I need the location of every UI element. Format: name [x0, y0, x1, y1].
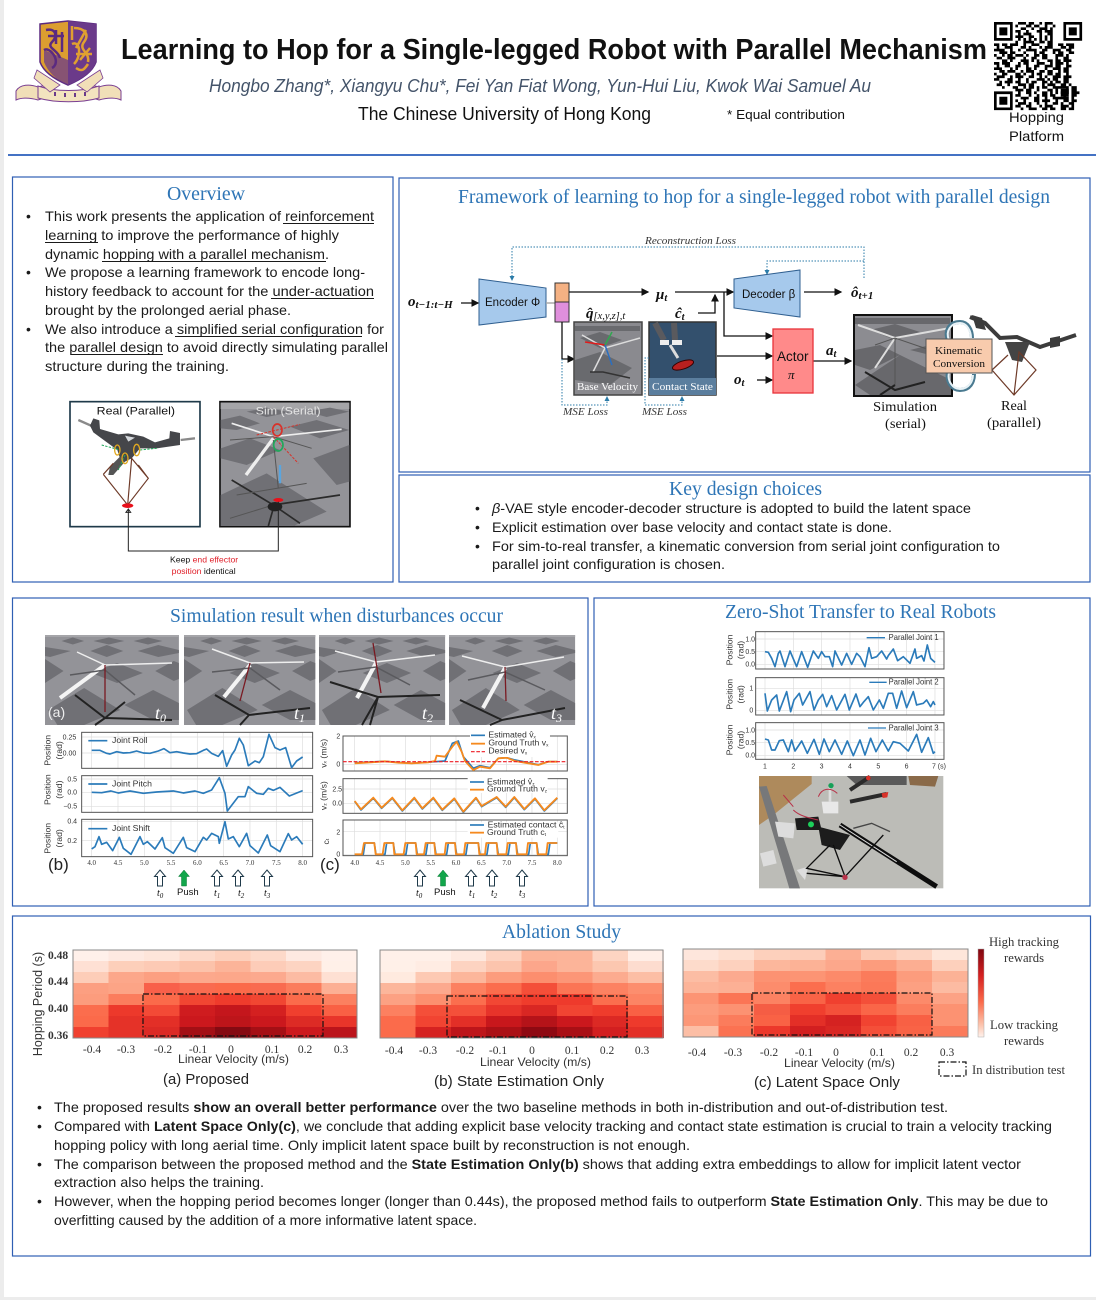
sim frame t1: 1 — [299, 711, 305, 725]
ablation findings bullet list: • — [37, 1156, 42, 1172]
heatmap (a) proposed: 0.44 — [48, 976, 68, 988]
joint roll chart — [43, 732, 313, 768]
colour bar legend: Low tracking — [990, 1018, 1059, 1032]
heatmap (b) state estimation only: Linear Velocity (m/s) — [480, 1055, 591, 1069]
overview bullet list: This work presents the application of reinforcement — [45, 208, 374, 224]
base velocity vz chart: 2.5 — [332, 786, 342, 793]
heatmap (a) proposed: 0.48 — [48, 950, 68, 962]
contact state chart: 7.0 — [502, 859, 512, 867]
base velocity vx chart: x — [525, 751, 528, 756]
contact state chart: 7.5 — [528, 859, 537, 867]
joint shift chart: 7.0 — [246, 859, 255, 867]
joint pitch chart: Joint Pitch — [112, 778, 152, 788]
joint shift chart: 5.0 — [140, 859, 149, 867]
image captions — [873, 399, 1041, 432]
heatmap (c) latent space only: 0.3 — [940, 1047, 954, 1059]
real robot — [970, 315, 1076, 395]
colour bar legend — [978, 935, 1060, 1048]
colour bar legend: rewards — [1004, 1034, 1044, 1048]
parallel joint 3: 6 — [905, 763, 909, 770]
parallel joint 3: 1 — [763, 763, 767, 770]
math labels: o — [734, 372, 742, 388]
heatmap (b) state estimation only: -0.3 — [419, 1045, 437, 1057]
image captions: Simulation — [873, 400, 937, 415]
contact state chart: 6.0 — [452, 859, 461, 867]
overview bullet list: We also introduce a simplified serial configuration for — [45, 321, 384, 337]
timeline arrows (b): 0 — [160, 892, 164, 900]
contact state chart: t — [563, 825, 565, 830]
ablation findings bullet list: The proposed results show an overall better performance over the two baseline methods in both in-distribution and out-of-distribution test. — [54, 1099, 948, 1115]
base velocity vz chart: vz (m/s) — [318, 781, 328, 810]
sim frame t3: t — [551, 703, 556, 723]
heatmap (c) latent space only: Linear Velocity (m/s) — [784, 1056, 895, 1070]
heatmap (b) state estimation only — [380, 950, 664, 1090]
sim frame t2 — [319, 635, 445, 725]
parallel joint 3: Position — [725, 724, 735, 755]
ablation findings bullet list: • — [37, 1118, 42, 1134]
parallel joint 2: Parallel Joint 2 — [889, 677, 939, 687]
parallel joint 1: Position — [725, 634, 735, 665]
overview bullet list: structure during the training. — [45, 358, 229, 374]
icon: QR code — [994, 23, 1081, 109]
parallel joint 1 — [725, 632, 944, 669]
sim frame t2: t — [422, 703, 427, 723]
heatmap (c) latent space only: 0.2 — [904, 1047, 918, 1059]
key design bullet list: Explicit estimation over base velocity and contact state is done. — [492, 519, 892, 535]
kinematic conversion: Conversion — [933, 358, 985, 370]
sim frame t0: t — [155, 703, 160, 723]
caption: keep end effector position identical: Keep end effector — [170, 555, 238, 565]
parallel joint 2: 1 — [749, 686, 753, 693]
parallel joint 3: 3 — [820, 763, 824, 770]
parallel joint 3: Parallel Joint 3 — [889, 722, 939, 732]
header divider — [8, 154, 1096, 156]
encoder: Encoder Φ — [485, 297, 540, 309]
heatmap (b) state estimation only: -0.1 — [489, 1045, 507, 1057]
overview bullet list: • — [26, 264, 31, 280]
connector arrow — [126, 502, 281, 551]
joint roll chart: 0.25 — [63, 734, 76, 741]
joint shift chart: 0.2 — [67, 838, 77, 845]
affiliation: The Chinese University of Hong Kong — [358, 104, 651, 124]
joint roll chart: 0.00 — [63, 750, 76, 757]
heatmap (c) latent space only: -0.3 — [724, 1047, 742, 1059]
parallel joint 2: (rad) — [735, 685, 745, 703]
heatmap (b) state estimation only: 0.1 — [565, 1045, 579, 1057]
base velocity vz chart: 0.0 — [332, 801, 342, 808]
figure: real vs sim end effector — [70, 402, 350, 576]
timeline arrows (b): t — [157, 888, 160, 899]
overview bullet list: brought by the prolonged aerial phase. — [45, 302, 291, 318]
ablation findings bullet list: However, when the hopping period becomes longer (longer than 0.44s), the proposed method fails to outperform State Estimation Only. This may be due to — [54, 1193, 1048, 1209]
heatmap (a) proposed: 0.1 — [265, 1044, 279, 1056]
real parallel robot: Real (Parallel) — [97, 405, 175, 417]
panel: overview — [12, 177, 393, 582]
math labels: t — [742, 378, 746, 389]
base velocity vz chart: Ground Truth v — [487, 784, 545, 794]
QR caption: Hopping — [1009, 109, 1064, 125]
parallel joint 2 — [725, 677, 944, 715]
timeline arrows (b): 3 — [266, 892, 271, 900]
joint pitch chart: (rad) — [54, 780, 64, 799]
actor: π — [788, 367, 795, 382]
overview bullet list: • — [26, 321, 31, 337]
parallel joint 3: 0.0 — [745, 753, 755, 760]
heatmap (c) latent space only — [683, 949, 969, 1091]
heatmap (a) proposed: 0 — [228, 1044, 234, 1056]
math labels: ĉ — [675, 306, 682, 322]
heatmap (a) proposed: Hopping Period (s) — [31, 952, 45, 1056]
base velocity vz chart: z — [545, 789, 548, 794]
parallel joint 3: 2 — [791, 763, 795, 770]
joint shift chart — [43, 819, 313, 867]
key design bullet list: For sim-to-real transfer, a kinematic conversion from serial joint configuration to — [492, 538, 1000, 554]
overview bullet list: • — [26, 208, 31, 224]
base velocity vx chart: 2 — [336, 734, 340, 741]
ablation findings bullet list: extraction also helps the training. — [54, 1174, 264, 1190]
ablation findings bullet list: • — [37, 1193, 42, 1209]
input observation label and arrow: o — [408, 294, 416, 310]
input observation label and arrow: t−1:t−H — [416, 299, 453, 311]
heatmap (b) state estimation only: 0 — [529, 1045, 535, 1057]
sim frame t0 — [45, 635, 179, 725]
ablation findings bullet list — [37, 1099, 1052, 1228]
timeline arrows (b): 2 — [241, 892, 245, 900]
key design bullet list — [475, 500, 1000, 572]
heading: framework: Framework of learning to hop for a single-legged robot with parallel design — [458, 186, 1050, 208]
sim frame t3: 3 — [555, 711, 562, 725]
sim frame t2: 2 — [427, 711, 433, 725]
colour bar legend: rewards — [1004, 951, 1044, 965]
contact state chart: 4.5 — [376, 859, 385, 867]
MSE loss paths: MSE Loss — [641, 407, 687, 418]
joint shift chart: Position — [43, 823, 53, 854]
timeline arrows (c) — [414, 870, 528, 900]
heatmap (a) proposed: 0.2 — [298, 1044, 312, 1056]
overview bullet list: history feedback to account for the under-actuation — [45, 283, 374, 299]
heatmap (c) latent space only: -0.1 — [795, 1047, 813, 1059]
joint pitch chart: Position — [43, 774, 53, 805]
base velocity vx chart: x — [546, 743, 549, 748]
simulation image — [854, 315, 952, 396]
in-distribution legend: In distribution test — [972, 1063, 1066, 1077]
timeline arrows (b): t — [214, 888, 217, 899]
timeline arrows (c): 3 — [521, 892, 526, 900]
ablation findings bullet list: overfitting caused by the addition of a more informative latent space. — [54, 1212, 477, 1228]
simulated serial robot: Sim (Serial) — [256, 405, 321, 417]
decoder: Decoder β — [742, 289, 796, 301]
contact state chart: 5.5 — [426, 859, 436, 867]
base velocity vx chart — [318, 730, 567, 771]
math labels: a — [826, 343, 834, 359]
key design bullet list: β-VAE style encoder-decoder structure is adopted to build the latent space — [491, 500, 971, 516]
image captions: (serial) — [885, 417, 926, 432]
QR caption — [1009, 109, 1064, 144]
actor — [773, 329, 813, 393]
panel: zero-shot transfer — [594, 598, 1090, 906]
ablation findings bullet list: The comparison between the proposed method and the State Estimation Only(b) shows that adding extra embeddings to allow for implicit latent vector — [54, 1156, 1021, 1172]
heatmap (c) latent space only: -0.2 — [760, 1047, 778, 1059]
contact state chart: 6.5 — [477, 859, 486, 867]
image captions: (parallel) — [987, 416, 1041, 431]
math labels: t — [834, 349, 838, 360]
equal contribution note: * Equal contribution — [727, 107, 845, 122]
joint shift chart: 8.0 — [298, 859, 308, 867]
ablation findings bullet list: • — [37, 1099, 42, 1115]
parallel joint 2: 0 — [749, 708, 753, 715]
parallel joint 3: 7 (s) — [932, 763, 946, 770]
authors: Hongbo Zhang*, Xiangyu Chu*, Fei Yan Fiat Wong, Yun-Hui Liu, Kwok Wai Samuel Au — [209, 76, 871, 96]
joint shift chart: 4.5 — [114, 859, 123, 867]
joint roll chart: (rad) — [54, 741, 64, 759]
label (b): (b) — [48, 855, 69, 874]
sim frame t0: (a) — [48, 704, 65, 720]
contact state chart: t — [545, 832, 547, 837]
contact state chart: 2 — [336, 829, 340, 836]
latent bar — [546, 283, 569, 322]
chart (b): joint positions — [43, 732, 313, 867]
encoder — [479, 279, 546, 325]
actor: Actor — [777, 349, 809, 364]
MSE loss paths — [562, 358, 687, 418]
reconstruction loss label and dotted paths — [512, 236, 864, 280]
heading: overview: Overview — [167, 183, 246, 205]
sim frame t1 — [184, 635, 315, 725]
heading: key design choices: Key design choices — [669, 478, 822, 500]
caption: keep end effector position identical — [170, 555, 238, 576]
latent mean arrows: μ — [656, 287, 664, 303]
base velocity vz chart: Estimated v̂ — [487, 776, 532, 786]
overview bullet list: dynamic hopping with a parallel mechanism. — [45, 246, 329, 262]
input observation label and arrow — [408, 294, 478, 311]
contact state chart: ct — [321, 838, 331, 845]
base velocity image: Base Velocity — [577, 382, 638, 393]
chart (c): state estimation — [318, 730, 567, 867]
heatmap (c) latent space only: 0.1 — [870, 1047, 884, 1059]
joint shift chart: 5.5 — [167, 859, 176, 867]
heading: zero-shot transfer: Zero-Shot Transfer to Real Robots — [725, 601, 996, 623]
heatmap (b) state estimation only: -0.2 — [456, 1045, 474, 1057]
MSE loss paths: MSE Loss — [562, 407, 608, 418]
contact state chart: Ground Truth c — [487, 827, 545, 837]
key design bullet list: parallel joint configuration is chosen. — [492, 556, 725, 572]
base velocity vx chart: x — [534, 735, 537, 740]
parallel joint 1: 0.5 — [745, 649, 755, 656]
timeline arrows (b): Push — [177, 887, 199, 898]
QR caption: Platform — [1009, 128, 1064, 144]
heatmap (a) proposed: Linear Velocity (m/s) — [178, 1052, 289, 1066]
contact state chart: 0 — [336, 852, 340, 859]
heatmap (a) proposed: (a) Proposed — [163, 1072, 249, 1088]
key design bullet list: • — [475, 538, 480, 554]
parallel joint 1: (rad) — [735, 641, 745, 659]
math labels: ô — [851, 285, 858, 301]
math labels: t+1 — [858, 290, 873, 302]
contact state image: Contact State — [652, 382, 714, 393]
simulated serial robot — [220, 402, 350, 527]
timeline arrows (c): 1 — [472, 892, 475, 900]
key design bullet list: • — [475, 519, 480, 535]
base velocity vx chart: Estimated v̂ — [488, 730, 534, 740]
heatmap (c) latent space only: (c) Latent Space Only — [754, 1075, 901, 1091]
heatmap (a) proposed: -0.1 — [189, 1044, 207, 1056]
heatmap (a) proposed: -0.4 — [83, 1044, 101, 1056]
timeline arrows (c): t — [491, 888, 494, 899]
joint shift chart: 0.4 — [67, 819, 77, 826]
key design bullet list: • — [475, 500, 480, 516]
timeline arrows (b): t — [238, 888, 241, 899]
heatmap (a) proposed: 0.40 — [48, 1003, 68, 1015]
parallel joint 3: 4 — [848, 763, 852, 770]
chart: parallel joints — [725, 632, 946, 770]
joint pitch chart: −0.5 — [63, 803, 77, 810]
timeline arrows (c): t — [416, 888, 419, 899]
sim frame t1: t — [294, 703, 299, 723]
joint pitch chart: 0.5 — [67, 776, 77, 783]
base velocity image — [574, 322, 642, 395]
in-distribution legend — [939, 1062, 1066, 1077]
parallel joint 1: 0.0 — [745, 662, 755, 669]
joint shift chart: (rad) — [54, 829, 64, 847]
latent mean arrows — [562, 287, 851, 380]
icon: university crest logo — [16, 21, 121, 102]
contact state chart: 5.0 — [401, 859, 410, 867]
base velocity vx chart: vx (m/s) — [318, 739, 328, 768]
parallel joint 1: Parallel Joint 1 — [889, 632, 939, 642]
overview bullet list: learning to improve the performance of highly — [45, 227, 339, 243]
timeline arrows (b): t — [264, 888, 267, 899]
joint shift chart: 7.5 — [272, 859, 281, 867]
heading: ablation study: Ablation Study — [502, 921, 621, 943]
overview bullet list: We propose a learning framework to encode long- — [45, 264, 365, 280]
base velocity vx chart: Desired v — [488, 746, 525, 756]
timeline arrows (c): t — [519, 888, 522, 899]
panel: simulation result — [12, 598, 588, 906]
sim frame t0: 0 — [160, 711, 166, 725]
decoder — [734, 270, 800, 317]
timeline arrows (c): t — [469, 888, 472, 899]
heatmap (a) proposed: -0.3 — [117, 1044, 135, 1056]
heatmap (a) proposed: 0.3 — [334, 1044, 348, 1056]
heatmap (a) proposed — [31, 950, 358, 1088]
base velocity vz chart: z — [532, 781, 535, 786]
joint shift chart: 6.5 — [219, 859, 229, 867]
sim frame t3 — [449, 635, 575, 725]
timeline arrows (c): Push — [434, 887, 456, 898]
heatmap (b) state estimation only: (b) State Estimation Only — [434, 1074, 605, 1090]
panel: key design choices — [399, 475, 1090, 582]
panel: framework — [399, 178, 1090, 472]
joint roll chart: Joint Roll — [112, 735, 148, 745]
math labels — [586, 285, 873, 389]
contact state chart: 4.0 — [350, 859, 360, 867]
heading: simulation result: Simulation result when disturbances occur — [170, 605, 503, 627]
photo: real robot — [759, 776, 943, 888]
parallel joint 2: Position — [725, 679, 735, 710]
reconstruction loss label and dotted paths: Reconstruction Loss — [644, 236, 736, 247]
contact state image — [649, 322, 716, 395]
heatmap (b) state estimation only: 0.3 — [635, 1045, 649, 1057]
label (c): (c) — [320, 855, 340, 874]
colour bar legend: High tracking — [989, 935, 1060, 949]
heatmap (a) proposed: 0.36 — [48, 1030, 68, 1042]
joint shift chart: Joint Shift — [112, 823, 151, 833]
heatmap (c) latent space only: 0 — [833, 1047, 839, 1059]
timeline arrows (c): 0 — [419, 892, 423, 900]
base velocity vx chart: Ground Truth v — [488, 738, 546, 748]
heatmap (a) proposed: -0.2 — [154, 1044, 172, 1056]
heatmap (b) state estimation only: -0.4 — [385, 1045, 403, 1057]
parallel joint 3: (rad) — [735, 731, 745, 749]
joint shift chart: 6.0 — [193, 859, 202, 867]
timeline arrows (b) — [154, 870, 272, 900]
caption: keep end effector position identical: position identical — [172, 566, 236, 576]
panel: ablation study — [12, 916, 1090, 1256]
parallel joint 3 — [725, 722, 946, 770]
kinematic conversion — [926, 322, 992, 390]
heatmap (b) state estimation only: 0.2 — [600, 1045, 614, 1057]
parallel joint 1: 1.0 — [745, 636, 755, 643]
timeline arrows (c): 2 — [494, 892, 498, 900]
contact state chart: 8.0 — [553, 859, 562, 867]
ablation findings bullet list: hopping policy with long aerial time. Only implicit latent space built by reconstruction is not enough. — [54, 1137, 690, 1153]
math labels: t — [682, 312, 686, 323]
heatmap (c) latent space only: -0.4 — [688, 1047, 706, 1059]
joint pitch chart: 0.0 — [67, 790, 77, 797]
parallel joint 3: 5 — [876, 763, 880, 770]
kinematic conversion: Kinematic — [935, 345, 982, 357]
image captions: Real — [1001, 399, 1027, 414]
real parallel robot — [70, 402, 200, 527]
parallel joint 3: 1.0 — [745, 727, 755, 734]
ablation findings bullet list: Compared with Latent Space Only(c), we conclude that adding explicit base velocity tracking and contact state estimation is crucial to train a velocity tracking — [54, 1118, 1052, 1134]
contact state chart — [321, 820, 567, 867]
math labels: q̂ — [586, 306, 594, 322]
base velocity vz chart — [318, 775, 567, 813]
latent mean arrows: t — [664, 293, 668, 304]
timeline arrows (b): 1 — [217, 892, 220, 900]
title: Learning to Hop for a Single-legged Robot with Parallel Mechanism — [121, 34, 987, 66]
parallel joint 3: 0.5 — [745, 740, 755, 747]
joint roll chart: Position — [43, 735, 53, 766]
joint shift chart: 4.0 — [87, 859, 97, 867]
overview bullet list — [26, 208, 388, 374]
contact state chart: Estimated contact ĉ — [488, 820, 563, 830]
joint pitch chart — [43, 774, 313, 812]
base velocity vx chart: 0 — [336, 762, 340, 769]
overview bullet list: the parallel design to avoid directly simulating parallel — [45, 339, 388, 355]
math labels: [x,y,z],t — [594, 311, 626, 322]
